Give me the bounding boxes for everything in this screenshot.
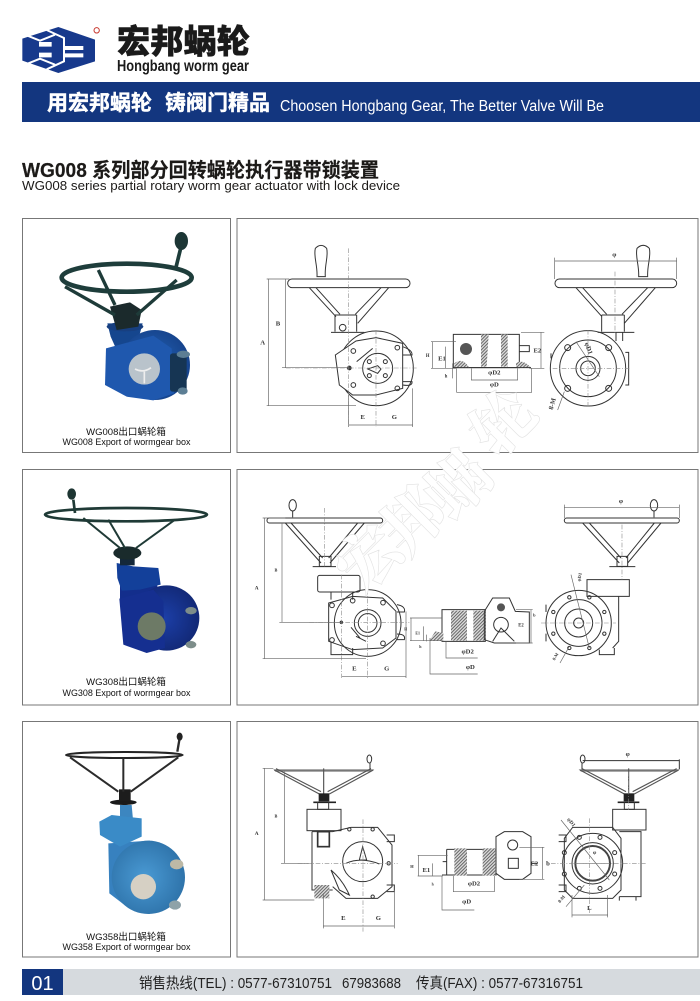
left view: A — [255, 586, 259, 592]
section view: E2 — [530, 860, 539, 867]
section view: E1 — [422, 867, 430, 874]
right view — [541, 498, 679, 663]
slogan banner: 铸阀门精品 — [165, 87, 270, 117]
left view: H — [404, 627, 407, 631]
watermark — [312, 365, 553, 608]
left view — [255, 755, 398, 932]
right view: φD1 — [577, 572, 584, 582]
section view: h — [419, 644, 422, 649]
left view: B — [276, 321, 281, 328]
left view: B — [275, 567, 278, 572]
panel: WG008 drawing — [237, 218, 698, 452]
watermark: 宏 — [312, 499, 422, 608]
left view: A — [260, 339, 265, 346]
panel: WG358 photo — [22, 722, 230, 957]
left view: G — [376, 915, 381, 922]
left view: A — [255, 831, 259, 837]
title: WG008 series partial rotary worm gear actuator with lock device — [22, 178, 400, 193]
section view: H — [410, 864, 414, 869]
right view: L — [587, 905, 592, 912]
panel: WG308 drawing — [237, 470, 698, 705]
right view: φ — [619, 498, 623, 505]
right view: φD1 — [565, 817, 576, 829]
caption — [62, 676, 191, 699]
watermark: 蜗 — [401, 428, 508, 535]
section view — [426, 332, 544, 392]
panel: WG008 photo — [22, 218, 230, 452]
left view: G — [392, 414, 397, 421]
panel: WG358 drawing — [237, 722, 698, 957]
left view: E — [360, 414, 365, 421]
section view: φD2 — [462, 648, 474, 655]
slogan banner — [22, 82, 700, 122]
product photo: WG308 — [45, 488, 207, 653]
right view: φD1 — [583, 342, 593, 355]
caption: WG008 Export of wormgear box — [62, 437, 191, 448]
section view — [410, 598, 536, 674]
right view: 8-M — [558, 894, 567, 904]
right view — [548, 245, 677, 411]
footer bar — [22, 969, 700, 995]
contact line — [139, 974, 583, 992]
watermark: 邦 — [355, 464, 462, 571]
left view: G — [384, 666, 389, 673]
left view — [255, 500, 409, 678]
section view: E2 — [533, 347, 542, 354]
product photo: WG008 — [62, 232, 192, 400]
section view: H — [426, 354, 430, 359]
section view: b — [546, 860, 550, 867]
caption: WG358 Export of wormgear box — [62, 942, 191, 953]
logo wordmark: Hongbang worm gear — [117, 58, 249, 75]
section view: φD — [490, 381, 499, 388]
section view: φD2 — [468, 880, 481, 887]
slogan banner: 用宏邦蜗轮 — [47, 87, 152, 117]
section view: φD — [466, 664, 475, 671]
watermark: 轮 — [446, 365, 553, 472]
left view: E — [352, 666, 357, 673]
panel: WG308 photo — [22, 470, 230, 705]
caption: WG308 Export of wormgear box — [62, 688, 191, 699]
logo mark — [22, 27, 99, 73]
caption: WG358出口蜗轮箱 — [86, 931, 166, 943]
right view: 8-M — [548, 397, 558, 411]
page number: 01 — [31, 973, 54, 995]
caption — [62, 931, 191, 953]
section view: E1 — [438, 355, 446, 362]
technical drawing: WG358 — [255, 751, 679, 932]
section view: φD2 — [488, 370, 501, 377]
section view: E2 — [518, 623, 524, 628]
right view: φ — [612, 252, 616, 259]
technical drawing: WG008 — [260, 245, 677, 427]
slogan banner: Choosen Hongbang Gear, The Better Valve Will Be — [280, 98, 604, 115]
section view: φD — [462, 899, 471, 906]
contact line: 67983688 — [342, 975, 401, 992]
contact line: 销售热线(TEL) : 0577-67310751 — [139, 975, 332, 992]
logo wordmark: 宏邦蜗轮 — [117, 15, 250, 63]
title: WG008 系列部分回转蜗轮执行器带锁装置 — [22, 159, 379, 182]
right view — [551, 751, 679, 917]
caption: WG008出口蜗轮箱 — [86, 426, 166, 438]
contact line: 传真(FAX) : 0577-67316751 — [416, 974, 583, 992]
title — [22, 159, 400, 193]
section view: b — [533, 612, 536, 617]
product photo: WG358 — [66, 733, 185, 914]
section view: h — [432, 883, 434, 887]
left view — [260, 245, 418, 427]
caption — [62, 426, 191, 448]
caption: WG308出口蜗轮箱 — [86, 676, 166, 688]
right view: φ — [626, 751, 630, 758]
right view: 8-M — [551, 652, 559, 661]
section view — [410, 832, 550, 910]
left view: E — [341, 915, 346, 922]
left view: B — [275, 813, 278, 818]
section view: E1 — [415, 631, 420, 636]
page number — [22, 969, 63, 995]
right view: φ — [593, 850, 597, 856]
section view: h — [445, 374, 448, 379]
technical drawing: WG308 — [255, 498, 679, 678]
